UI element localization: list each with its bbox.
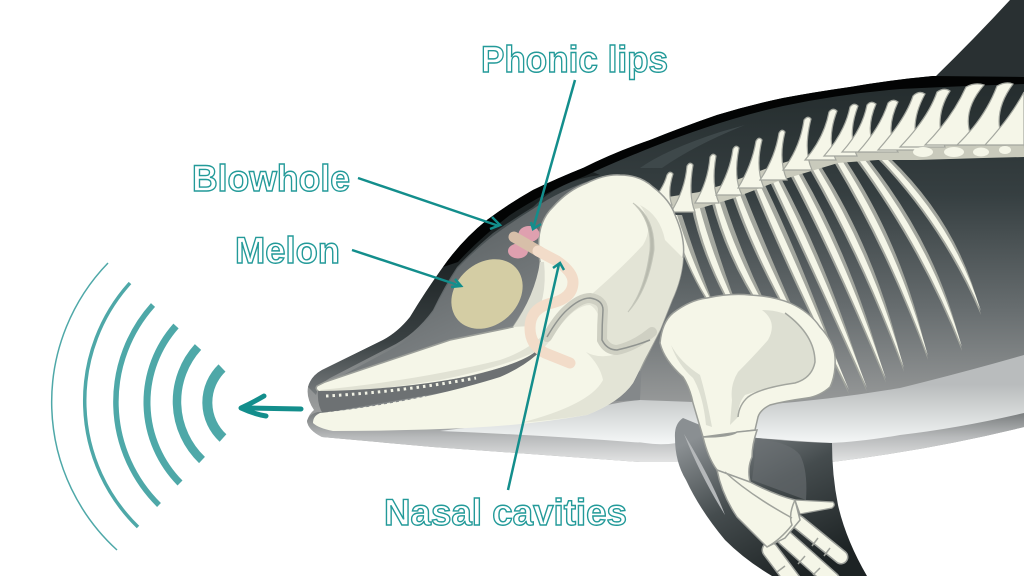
scapula crease [738,313,815,417]
phonic lips [508,226,540,258]
arrow: blowhole [358,178,500,229]
scapula rim shading [671,345,712,427]
body silhouette [307,76,1024,462]
bone joints [725,472,830,575]
icon: sound waves [52,263,223,550]
forearm bone [703,430,757,482]
arrow: sound direction [241,396,301,416]
skull [313,175,684,431]
arrow: melon [352,250,461,287]
scapula shading [730,310,815,425]
flipper [675,418,867,576]
spinous processes [648,83,1024,212]
jaw gap [318,345,555,414]
upper teeth [326,378,476,396]
head inner tissue [318,177,650,415]
light band beside melon [513,262,545,327]
cranium crease [628,203,654,312]
melon [437,245,537,343]
label: Nasal cavities: Nasal cavities [384,492,627,533]
flipper inner panel [752,439,806,500]
spine [648,83,1024,212]
scapula [660,294,835,437]
thumb [795,500,834,514]
jaw hinge band [547,298,652,350]
dorsal fin [935,0,1024,80]
cranium shading [533,205,683,392]
vertebra highlights [913,146,1011,157]
label: Melon: Melon [235,230,340,271]
nasal cavities [514,237,573,363]
arrow: phonic lips [531,80,575,229]
fingers [770,522,841,576]
forearm and wrist [717,470,800,547]
ribs [669,158,981,394]
jaw shading [520,335,655,423]
flipper hand bones [717,470,841,576]
upper jaw and cranium [316,175,684,395]
upper jaw lower shading [320,330,548,393]
back dark stripe [308,168,600,395]
back black band [443,76,1024,267]
vertebra bodies [662,149,1024,206]
belly: lower band [307,410,1024,462]
back lighter strip [640,125,745,168]
label: Blowhole: Blowhole [192,158,350,199]
flipper front edge highlight [684,434,725,515]
label: Phonic lips: Phonic lips [481,39,668,80]
dolphin illustration [307,0,1024,576]
arrow: nasal cavities [508,263,564,490]
belly: light band [440,355,1024,444]
lower jaw [313,305,655,431]
lower teeth [328,397,425,413]
